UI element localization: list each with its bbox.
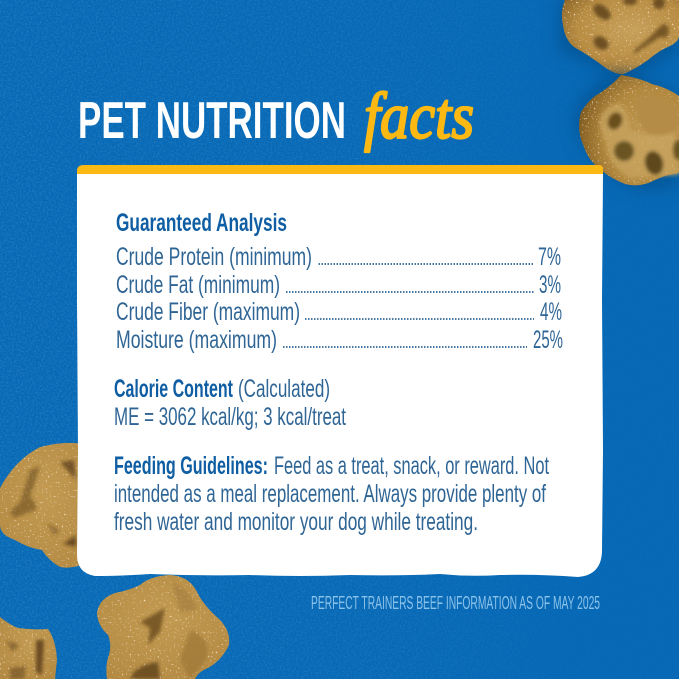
table: guaranteed analysis rows: Crude Protein (minimum)	[116, 243, 312, 271]
text: feeding guidelines	[114, 452, 549, 536]
text: calorie content: Calorie Content	[114, 375, 233, 403]
yellow header bar	[77, 165, 603, 174]
table: guaranteed analysis rows: 7%	[538, 243, 561, 271]
text: calorie content: (Calculated)	[238, 375, 330, 403]
table: guaranteed analysis rows: Moisture (maximum)	[116, 326, 277, 354]
icon: kibble top right upper	[555, 0, 679, 80]
text: calorie content	[114, 375, 346, 431]
panel: nutrition card	[77, 165, 603, 577]
text: calorie content: ME = 3062 kcal/kg; 3 kcal/treat	[114, 403, 346, 431]
text: feeding guidelines: fresh water and monitor your dog while treating.	[114, 508, 478, 536]
table: guaranteed analysis rows: 25%	[533, 326, 563, 354]
icon: kibble top right lower	[575, 72, 679, 190]
table: guaranteed analysis rows: Crude Fat (minimum)	[116, 271, 280, 299]
table: guaranteed analysis rows: 4%	[540, 298, 562, 326]
heading: guaranteed analysis: Guaranteed Analysis	[116, 209, 287, 237]
title: facts: facts	[364, 80, 474, 153]
table: guaranteed analysis rows: 3%	[539, 271, 561, 299]
background	[0, 0, 475, 679]
icon: kibble left	[0, 443, 90, 568]
title: PET NUTRITION: PET NUTRITION	[78, 92, 346, 150]
icon: kibble bottom center	[97, 575, 229, 679]
table: guaranteed analysis rows	[116, 243, 563, 354]
table: guaranteed analysis rows: Crude Fiber (maximum)	[116, 298, 300, 326]
text: feeding guidelines: Feeding Guidelines:	[114, 452, 268, 480]
icon: kibble bottom left	[0, 617, 57, 679]
